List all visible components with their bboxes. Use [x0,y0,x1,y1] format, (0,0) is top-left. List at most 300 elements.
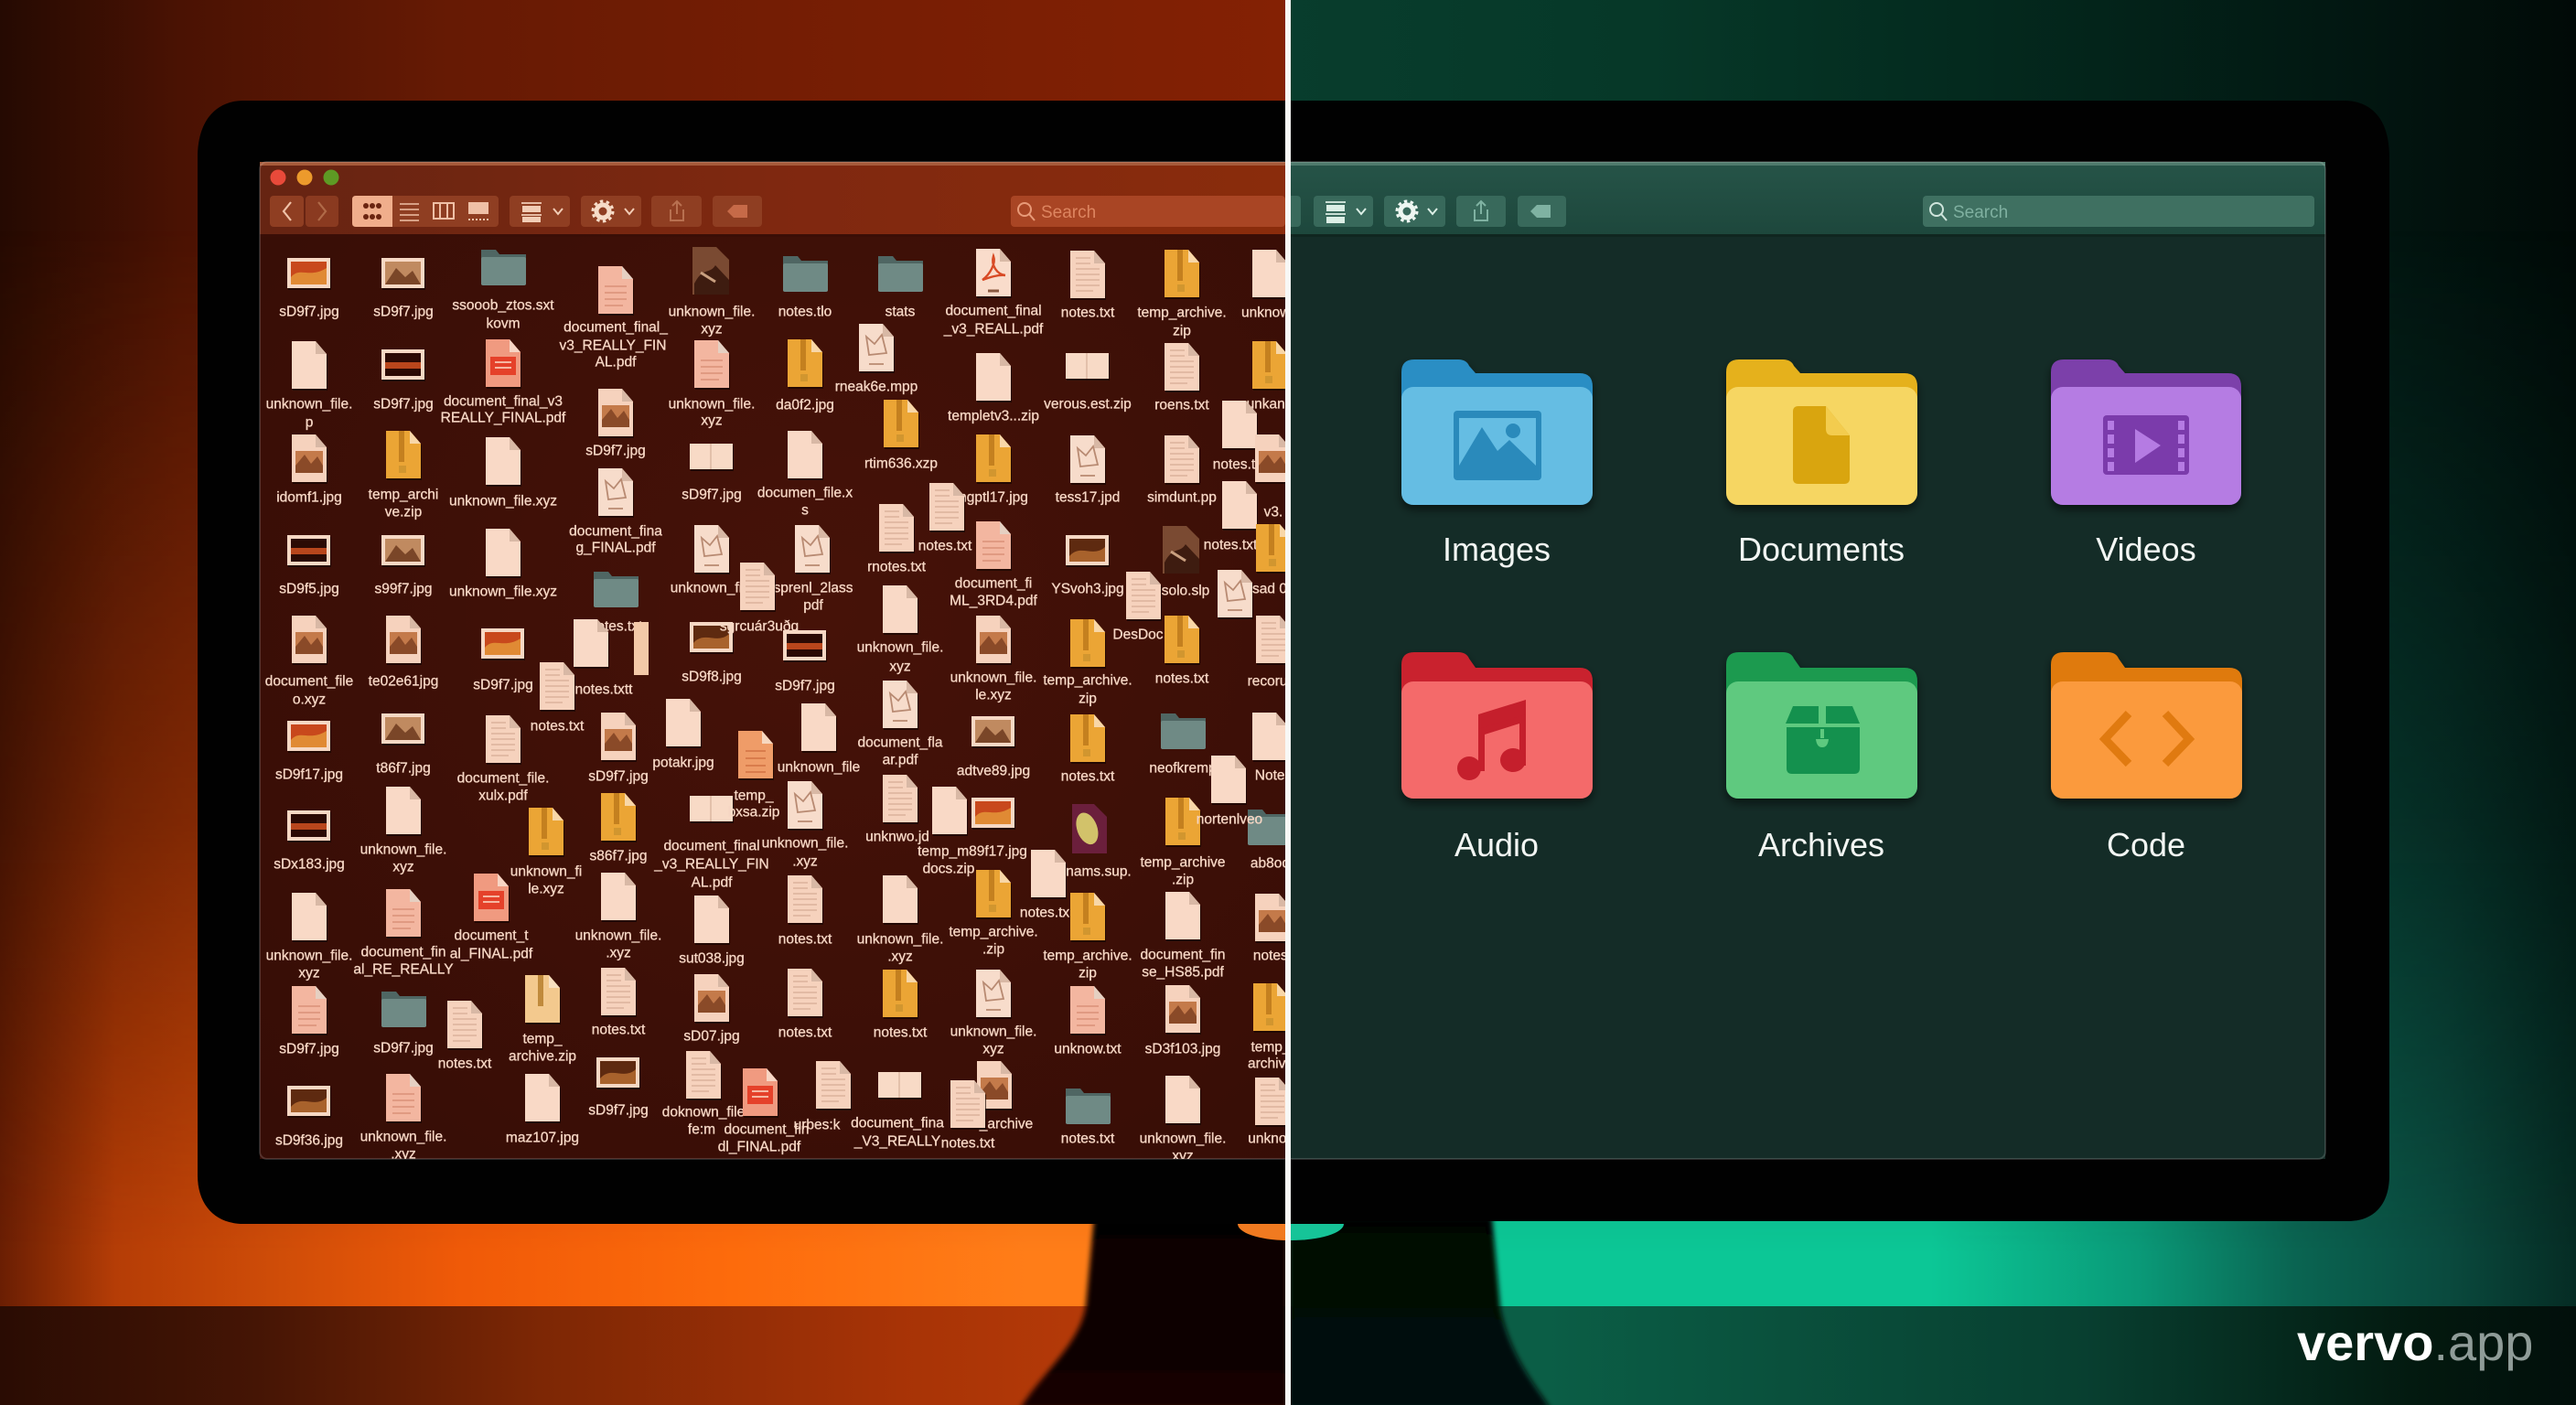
file: document_final: document_fina [851,1116,944,1131]
file: unknown_file.xyz: unknown_file. [360,1129,446,1145]
file: notes [1253,894,1292,964]
file: document_file: document_file [265,673,353,690]
file: simdunt.pp [1147,435,1217,505]
file: red document: dl_FINAL.pdf [718,1140,801,1154]
monitor stand right half [1288,1217,1551,1405]
file: document_file [457,715,549,803]
file: sD9f7.jpg: sD9f7.jpg [279,304,339,320]
file: document_final: _V3_REALLY [853,1134,940,1149]
file: verous.est.zip [1044,353,1132,412]
screen outline [260,162,2325,1159]
file: te02e61.jpg: te02e61jpg [369,673,438,690]
file: unknown_file.xyz: unknown_file.xyz [449,494,557,509]
file: unknown_file.xyz: .xyz [391,1147,416,1162]
file: YSvoh3.jpg [1051,535,1124,596]
action gear button [1384,196,1445,227]
file: unknown_file: unknown_file [778,759,860,776]
file: unknown_file: le.xyz [975,688,1012,702]
file: unknown: unknown [1241,306,1298,320]
file: temp_archive.zip: .zip [982,942,1004,957]
file: stats folder [878,256,923,320]
file: recorum: recorum [1248,673,1299,690]
file: nams.sup: nams.sup. [1066,863,1132,880]
folder body [1726,359,1917,505]
file: sD9f8.jpg: sD9f8.jpg [682,670,742,684]
file: ngptl17.jpg [959,434,1028,505]
file: urbes: urbes:k [794,1118,841,1132]
file: document_final pdf: document_fina [569,523,662,540]
file: adtve89.jpg [957,716,1030,779]
file: unknown_file [671,525,753,596]
file: sprenl_2lass.pdf [773,525,853,613]
background: left orange wall [0,0,1285,1306]
file: pink pdf: document_fi [955,576,1032,591]
label: Videos [2096,531,2196,568]
file: potakr.jpg: potakr.jpg [652,756,714,770]
file: sD9f7.jpg [373,258,434,320]
file: unknown_file.xyz [669,247,755,337]
file: document pdf: document_fin [1140,948,1226,962]
file: neofkremp [1149,713,1217,776]
file: sDx183.jpg: sDx183.jpg [274,856,345,873]
file: maz107.jpg [506,1074,579,1145]
background: right green wall [1285,0,2576,1306]
file: temp_archive.zip: DesDoc [1112,627,1164,642]
file: unknown_file.xyz [575,873,661,960]
file: zip: unkano [1247,397,1293,412]
file: notes.txt [874,970,928,1041]
file: temp_archive.zip: zip [1173,324,1191,338]
file: sDx183.jpg [274,810,345,873]
file: unknow.txt [1054,986,1122,1057]
folder: Code [2051,652,2242,863]
file: temp_archive [1248,983,1293,1072]
file: unknown_file.xyz [857,585,943,675]
file: photo doc [1255,434,1291,484]
file: unknown_file.xyz [857,875,943,964]
toolbar band [260,162,1285,237]
file: folder [452,250,554,331]
file: notes.txt: notes.txt [1204,538,1258,552]
file: simdunt.pp: simdunt.pp [1147,490,1217,505]
file: documen_file: s [801,503,809,518]
folder body [1401,359,1593,505]
orange light under bezel [1238,1224,1285,1240]
folder: Images [1401,359,1593,568]
file: unknown_file.xyz: unknown_file. [1140,1131,1226,1147]
file: s86f7.jpg: s86f7.jpg [590,849,647,863]
file: unknown_file.xyz [510,808,582,896]
file: unknown_file.xyz: unknown_file. [857,640,943,655]
file: notes.txt: notes.txt [1155,671,1209,686]
file: temp zip label: bxsa.zip [728,805,779,820]
file: sD9f7.jpg [279,986,339,1057]
label: Archives [1758,826,1884,863]
file: sprenl_2lass.pdf: sprenl_2lass [773,580,853,596]
background: left table [0,1306,1285,1405]
file: sD9f7.jpg [373,349,434,412]
panel: cluttered Finder window [260,162,1299,1164]
file: sut038.jpg: sut038.jpg [679,951,745,966]
file: notes.txt [1155,616,1209,686]
file: photo [1163,526,1199,574]
file: temp docs [918,798,1027,876]
brand wordmark: vervo.app [2297,1314,2533,1371]
file: sD9f8.jpg [682,618,799,684]
tag button [1518,196,1566,227]
file: tess17.jpd: tess17.jpd [1056,490,1120,505]
icon: code brackets [2105,713,2189,764]
window background [1291,162,2325,1159]
file: folder: ab8oc [1250,856,1289,871]
search field [1923,196,2314,227]
file: temp zip label: temp_ [734,788,774,803]
file: document_fla: ar.pdf [883,752,918,768]
file: sut038.jpg [679,896,745,966]
file: unknown_file.xyz: .xyz [792,854,818,869]
file: te02e61.jpg [369,616,438,690]
file: temp_archive.zip [1043,619,1164,706]
file: unknown_file.p: unknown_file. [266,397,352,412]
file: sD9f8.jpg: sgrcuár3uðq [720,618,799,635]
file: rnotes.txt stacked: rnotes.txt [867,560,927,574]
file: unknown_file.xyz: xyz [392,860,414,874]
file: unknown_file.xyz: unknown_file. [575,928,661,944]
file: unknwo [865,775,929,845]
file: sD9f7.jpg [682,444,742,503]
file: red pdf: al_FINAL.pdf [450,946,533,962]
file: temp_archive.zip [1140,798,1226,887]
toolbar band [1291,162,2325,237]
file: folder [1197,810,1293,871]
file: unknown: unknow [1248,1131,1298,1147]
file: document_final: _v3_REALLY_FIN [653,856,769,873]
file: sD9f7.jpg: sD9f7.jpg [682,487,742,503]
file: notes folder [778,256,832,320]
tag button [713,196,762,227]
file: unknown_file.xyz: unknown_file. [266,948,352,964]
file: unknown_file.xyz: xyz [889,659,911,675]
file: document_final: document_final [663,838,760,854]
file: temp_archive.zip [949,870,1038,957]
back and forward buttons [270,196,338,227]
file: temp docs: temp_m89f17.jpg [918,843,1027,860]
background: right table [1285,1306,2576,1405]
file: unknown_file.xyz [360,787,446,874]
file: temp_archive.zip: temp_archi [369,487,438,503]
file: notes: notes. [1253,948,1292,964]
center divider line [1285,0,1291,1405]
file: recorum [1248,616,1299,690]
file: sD3f103.jpg: sD3f103.jpg [1145,1041,1220,1057]
file: Notes: Notes [1255,768,1292,783]
file: unknown_file.xyz: unknown_fi [510,863,582,880]
file: temp_archive.zip: temp_archive. [1043,948,1132,964]
view mode buttons [352,196,499,227]
label: Documents [1738,531,1905,568]
file: s99f7.jpg: s99f7.jpg [375,582,432,596]
file: potakr.jpg [652,699,714,770]
file: adtve89.jpg: adtve89.jpg [957,763,1030,779]
file: temp_archive.zip: ve.zip [385,505,422,520]
file: notes.txt [1204,524,1292,574]
file: sD9f36.jpg [275,1086,343,1149]
file: notes.txt [778,875,832,948]
file: template zip: templetv3...zip [948,408,1039,424]
file: unknown_file.xyz [762,781,848,869]
label: Audio [1454,826,1539,863]
file: notes.txt stacked [531,662,585,734]
file: document_file: document_file. [457,770,549,787]
file: t86f7.jpg: t86f7.jpg [376,761,431,776]
file: unknown_file.xyz [449,529,557,600]
file: folder: nortenlveo [1197,812,1262,827]
file: notes.txt: notes.txt [941,1136,995,1151]
file: document_final pdf: document_final [945,304,1042,318]
file: da0f2.jpg: da0f2.jpg [776,397,834,413]
file: sD9f7.jpg [588,713,649,785]
file: unknown_file.xyz: unknown_file. [669,397,755,412]
file: unknown_file.xyz: unknown_file. [762,836,848,851]
folder: Videos [2051,359,2241,568]
file: sD9f7.jpg [279,258,339,320]
file: temp_archive.zip [369,431,438,520]
file: sD9f7.jpg: sD9f7.jpg [585,443,646,459]
file: unknown_file.xyz: xyz [701,322,723,337]
icon: document [1793,406,1850,484]
file: photo doc: _archive [979,1116,1033,1132]
file: notes.txt [1061,714,1115,785]
file: notes.txt: notes.txt [874,1024,928,1041]
file: stats folder: stats [886,304,916,320]
file: ngptl17.jpg: ngptl17.jpg [959,490,1028,505]
file: document_final [353,889,454,977]
file: document_final pdf [943,249,1044,337]
file: notes.txt [778,969,832,1041]
file: sD07.jpg: sD07.jpg [683,1028,740,1045]
file: solo.slp [1126,572,1209,621]
file: sD9f7.jpg [775,630,835,693]
file: document_fla [857,681,943,768]
file: unknown_file [778,703,860,776]
file: sD9f7.jpg [588,1057,649,1118]
file: temp_archive.zip: temp_archive. [1137,306,1227,320]
file: notes.txtt: notes.txtt [575,682,633,697]
file: da0f2.jpg [776,339,834,413]
file: unknown_file.xyz [950,970,1036,1057]
file: temp_archive.zip: temp_archive. [1043,673,1132,688]
file: temp_archive.zip: temp_archive [1140,854,1226,871]
file: notes.txt: notes.txt [1061,306,1115,320]
file: sD9f17.jpg [275,721,343,783]
file: unknwo: unknwo.jd [865,829,929,845]
file: sD9f5.jpg [279,535,339,596]
file: unknown_file.xyz [449,437,557,509]
file: unknown_file.xyz: unknown_file. [669,304,755,320]
file: rtim636.xzp [864,400,938,472]
file: solo.slp: solo.slp [1162,584,1209,598]
file: document_final pdf [569,468,662,556]
search field: Search [1953,203,2008,222]
file: rneak6e.mpp: rneak6e.mpp [835,379,918,395]
file: notes.txt folder [1061,1089,1115,1147]
file: zip [1247,341,1293,412]
file: s99f7.jpg [375,535,432,596]
file: Notes [1252,713,1292,783]
file: overlapping doc [740,563,776,612]
file: rneak6e.mpp [835,324,918,395]
file: document_final: AL.pdf [596,355,637,370]
file: temp_archive.zip [1137,250,1227,338]
file: orange doc [738,731,774,780]
file: sD3f103.jpg [1145,985,1220,1057]
file: verous.est.zip: verous.est.zip [1044,397,1132,412]
folder: Archives [1726,652,1917,863]
file: temp_archive.zip [1020,893,1132,981]
monitor stand left half [1020,1217,1288,1405]
action gear button [581,196,641,227]
folder: Documents [1726,359,1917,568]
file: idomf1.jpg [276,434,342,505]
file: unknown_file.xyz: .xyz [887,949,913,964]
icon: storage box [1786,706,1860,774]
file: unknown_file.p: p [306,415,313,430]
file: unknown_file.xyz: xyz [1172,1149,1194,1164]
file: notes.txt [941,1080,995,1151]
file: folder notes.txt: notes.txt [589,618,643,635]
file: urbes [794,1061,852,1132]
file: document_file: o.xyz [293,692,326,708]
file: sprenl_2lass.pdf: pdf [803,598,823,613]
file: unknown_file: unknown_file [671,580,753,596]
file: rtim636.xzp: rtim636.xzp [864,456,938,472]
file: document_final pdf: _v3_REALL.pdf [943,322,1044,337]
file: sD9f7.jpg: sD9f7.jpg [279,1041,339,1057]
file: unknown_file [950,616,1036,702]
file: notes.txt: notes.txt [778,1024,832,1041]
file: temp_archive.zip [509,975,576,1065]
file: doc: v3. [1264,505,1283,520]
file: unknown_file.xyz [1140,1076,1226,1164]
file: unknown_file.xyz: unknown_file. [857,931,943,948]
file: red pdf: document_final_v3 [444,393,563,410]
file: notes.txt: notes.txt [1061,768,1115,785]
file: notes.txt: notes.txt [592,1023,646,1037]
file: temp zip label [728,788,779,820]
folder: Audio [1401,652,1593,863]
file: unknown_file.xyz: .xyz [606,946,631,960]
file: sD9f7.jpg [585,389,646,459]
file: sD9f36.jpg: sD9f36.jpg [275,1132,343,1149]
file: unknown_file: unknown_file. [950,670,1036,686]
share button [1456,196,1506,227]
file: document_final [560,266,668,370]
file: red document: fe:m [688,1121,715,1138]
teal light under bezel [1291,1224,1344,1240]
file: nams.sup [1066,804,1132,880]
file: folder notes.txt [589,572,643,635]
window background [260,162,1285,1159]
file: sD9f5.jpg: sD9f5.jpg [279,582,339,596]
file: blank overlap [932,787,968,836]
file: sketch doc [1218,570,1287,619]
file: unknown [1248,1078,1298,1147]
file: pink pdf: ML_3RD4.pdf [950,593,1038,609]
label: Code [2107,826,2185,863]
file: doknown_file [662,1051,745,1120]
icon: music note [1457,700,1526,780]
file: unknown [1241,250,1298,320]
file: temp_archive: archive [1248,1056,1293,1072]
file: temp_archive.zip: notes.tx [1020,906,1069,920]
file: blank [1031,850,1067,899]
file: folder: kovm [486,316,521,331]
file: notes.txt: notes.txt [778,931,832,948]
file: document pdf [1140,892,1226,981]
file: temp_archive.zip: archive.zip [509,1048,576,1065]
file: unknown_file.xyz: xyz [298,966,320,981]
file: document_final: document_final_ [564,320,668,335]
file: photo doc [977,1061,1033,1132]
file: document_final: v3_REALLY_FIN [560,338,666,353]
file: pink pdf [950,521,1038,609]
file: red pdf [450,874,533,962]
file: unknown_file.xyz: xyz [701,413,723,428]
file: documen_file [757,431,853,518]
file: document_final [653,796,769,891]
file: sD07.jpg [683,974,740,1045]
file: document pdf: se_HS85.pdf [1142,964,1224,981]
file: sD9f17.jpg: sD9f17.jpg [275,767,343,783]
file: documen_file: documen_file.x [757,485,853,501]
arrange button [510,196,570,227]
file: temp_archive.zip: zip [1079,966,1097,981]
file: sD9f7.jpg: sD9f7.jpg [775,679,835,693]
monitor bezel [198,101,2389,1224]
file: document_final: AL.pdf [692,874,733,891]
window controls [271,170,338,185]
file: sketch doc: sad 0 [1252,582,1287,596]
file: sD9f7.jpg [473,628,533,693]
file: template zip [948,353,1039,424]
file: notes.txtt [574,619,649,697]
file: idomf1.jpg: idomf1.jpg [276,490,342,505]
file: overlapping blank [1211,756,1247,805]
file: red pdf: REALLY_FINAL.pdf [441,410,566,426]
file: sD9f7.jpg: sD9f7.jpg [373,304,434,320]
file: unknown_file.xyz [669,340,755,428]
label: Images [1443,531,1551,568]
file: temp docs: docs.zip [923,862,974,876]
file: red pdf [441,339,566,426]
file: unknown_file.xyz [360,1074,446,1162]
icon: picture [1454,411,1541,480]
file: roens.txt: roens.txt [1154,397,1209,413]
file: notes.txt folder: notes.txt [1061,1131,1115,1147]
file: unknown_file.xyz: le.xyz [528,882,564,896]
file: notes.txt [1213,401,1267,472]
share button [651,196,702,227]
icon: film strip [2103,415,2189,475]
panel: organized Finder window [1285,162,2325,1159]
file: notes.txt [1061,251,1115,320]
file: sD9f7.jpg: sD9f7.jpg [588,768,649,785]
file: s86f7.jpg [590,793,647,863]
file: tess17.jpd [1056,435,1120,505]
file: document_final: document_fin [360,944,446,960]
background: right teal glow [1291,406,2576,1306]
file: temp_archive: temp_ [1250,1039,1291,1056]
